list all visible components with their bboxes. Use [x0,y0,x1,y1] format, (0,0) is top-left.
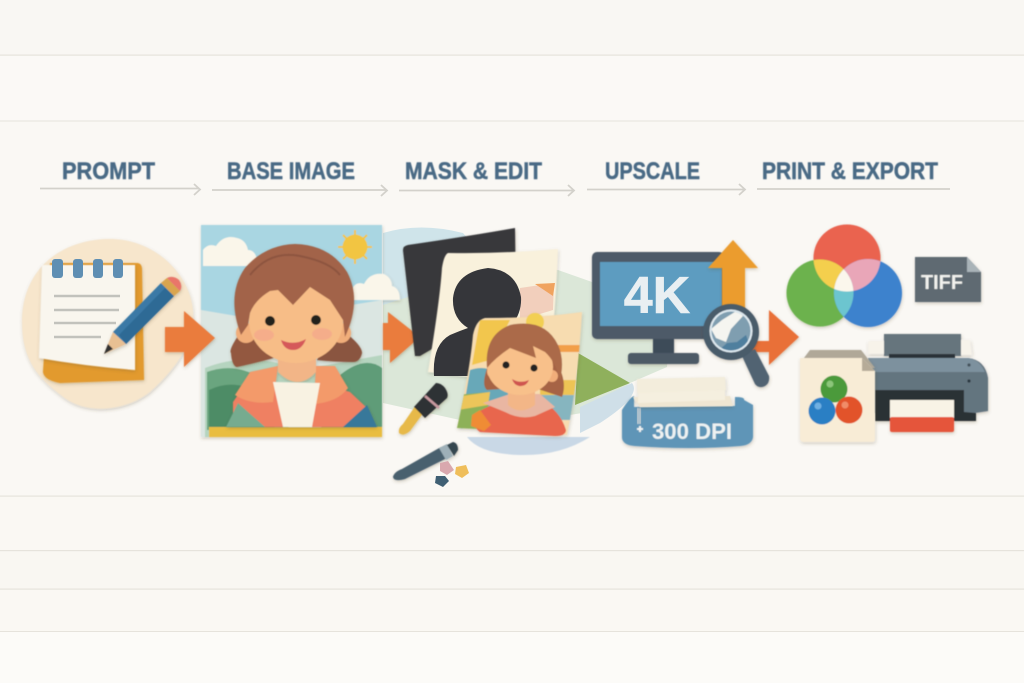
document with colour balls [800,350,875,442]
marker [399,383,448,435]
TIFF file icon [915,257,981,302]
pencil [104,277,181,354]
printed sheet [890,400,954,418]
front edited photo card [455,312,585,436]
heading: base image: BASE IMAGE [227,158,355,185]
silhouette [434,268,521,376]
TIFF file icon: TIFF [921,272,963,294]
heading: upscale: UPSCALE [605,158,700,185]
small portrait hair [487,324,562,380]
heading: print and export: PRINT & EXPORT [762,158,938,185]
panel: mask and edit [393,228,630,487]
panel: upscale [592,240,799,448]
sun on photo [526,313,544,331]
printer [868,334,988,432]
paper stack [633,377,733,407]
heading: prompt: PROMPT [62,158,155,185]
clouds [203,237,258,266]
sky [201,225,382,437]
ears [236,323,256,343]
timeline arrows under headings [40,184,950,196]
heading: mask and edit: MASK & EDIT [405,158,542,185]
black mask card [403,228,516,356]
paper confetti [440,461,454,475]
step headings [62,158,938,185]
note paper [39,265,135,370]
small portrait top [474,400,566,436]
neck [278,358,316,382]
arrow: base image to mask [383,312,420,363]
mouth [281,339,306,350]
hood collars [235,366,278,403]
girl portrait [226,244,377,427]
arrow: upscale to print [750,310,799,365]
RGB colour circles [786,224,902,327]
pigtails [230,330,277,367]
cream silhouette card [428,249,558,377]
small portrait face [487,366,499,378]
sun [338,230,372,264]
eyes [265,316,275,326]
panel: print and export [786,224,988,442]
cheeks [254,329,274,341]
300 DPI ribbon [622,396,753,448]
upward arrow [708,240,758,310]
jacket lower [233,383,283,427]
paint pen [393,442,458,480]
magnifier [703,304,769,387]
paper lines [54,296,120,337]
orange notepad backing [43,263,144,383]
arrow: prompt to base image [165,311,215,367]
300 DPI ribbon: 300 DPI [652,419,732,444]
panel: base image [201,225,400,437]
face [249,279,343,363]
pale mask background shapes [383,228,670,455]
yellow ground strip [209,427,382,437]
spiral rings [52,259,123,278]
panel: prompt [22,239,193,409]
green triangle arrow [575,353,630,405]
4K label: 4K [624,267,691,325]
small portrait hair back [484,360,514,390]
cream blob [22,239,193,409]
mist and hills [201,300,382,437]
hair [234,244,354,337]
shirt [273,382,320,427]
monitor [592,252,724,364]
